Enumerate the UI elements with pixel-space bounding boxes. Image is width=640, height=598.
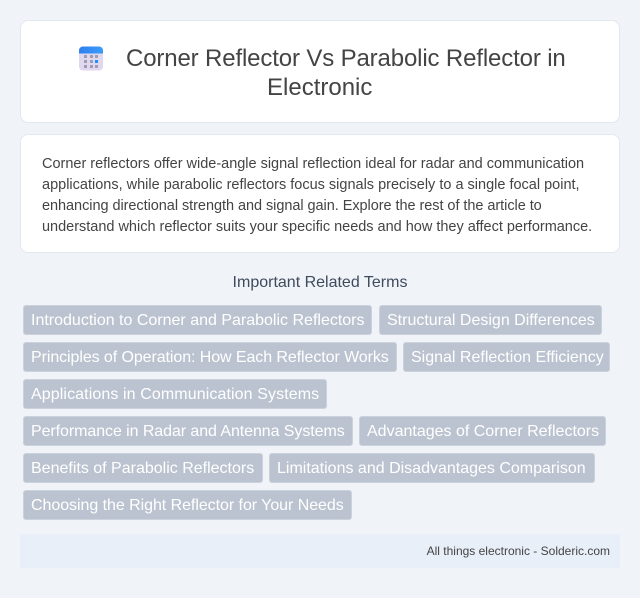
tag xyxy=(23,305,372,335)
tag xyxy=(23,416,353,446)
tag xyxy=(359,416,606,446)
tag: Principles of Operation: How Each Reflector Works xyxy=(31,349,389,366)
tag xyxy=(403,342,610,372)
tag: Signal Reflection Efficiency xyxy=(411,349,604,366)
footer bar xyxy=(20,534,620,568)
panel: description card xyxy=(20,134,620,253)
title: Corner Reflector Vs Parabolic Reflector in xyxy=(126,45,566,72)
icon: calendar xyxy=(79,46,103,70)
title: Electronic xyxy=(267,74,372,101)
tag: Advantages of Corner Reflectors xyxy=(367,423,599,440)
description text: understand which reflector suits your specific needs and how they affect performance. xyxy=(42,219,592,235)
panel: title card xyxy=(20,20,620,123)
tag: Structural Design Differences xyxy=(387,312,595,329)
tag: Benefits of Parabolic Reflectors xyxy=(31,460,254,477)
tag xyxy=(23,453,263,483)
tag: Limitations and Disadvantages Comparison xyxy=(277,460,586,477)
heading: important related terms: Important Related Terms xyxy=(233,274,407,291)
description text xyxy=(42,156,592,235)
tag xyxy=(23,379,327,409)
tag xyxy=(269,453,595,483)
tag xyxy=(379,305,602,335)
tag xyxy=(23,490,352,520)
tag: Applications in Communication Systems xyxy=(31,386,319,403)
tag group: related terms xyxy=(23,305,610,520)
tag: Performance in Radar and Antenna Systems xyxy=(31,423,345,440)
description text: enhancing directional strength and signal gain. Explore the rest of the article to xyxy=(42,198,542,214)
footer text: All things electronic - Solderic.com xyxy=(427,544,610,558)
description text: applications, while parabolic reflectors focus signals precisely to a single focal point, xyxy=(42,177,580,193)
title xyxy=(126,45,566,101)
tag xyxy=(23,342,397,372)
description text: Corner reflectors offer wide-angle signal reflection ideal for radar and communication xyxy=(42,156,584,172)
tag: Choosing the Right Reflector for Your Needs xyxy=(31,497,344,514)
tag: Introduction to Corner and Parabolic Reflectors xyxy=(31,312,365,329)
